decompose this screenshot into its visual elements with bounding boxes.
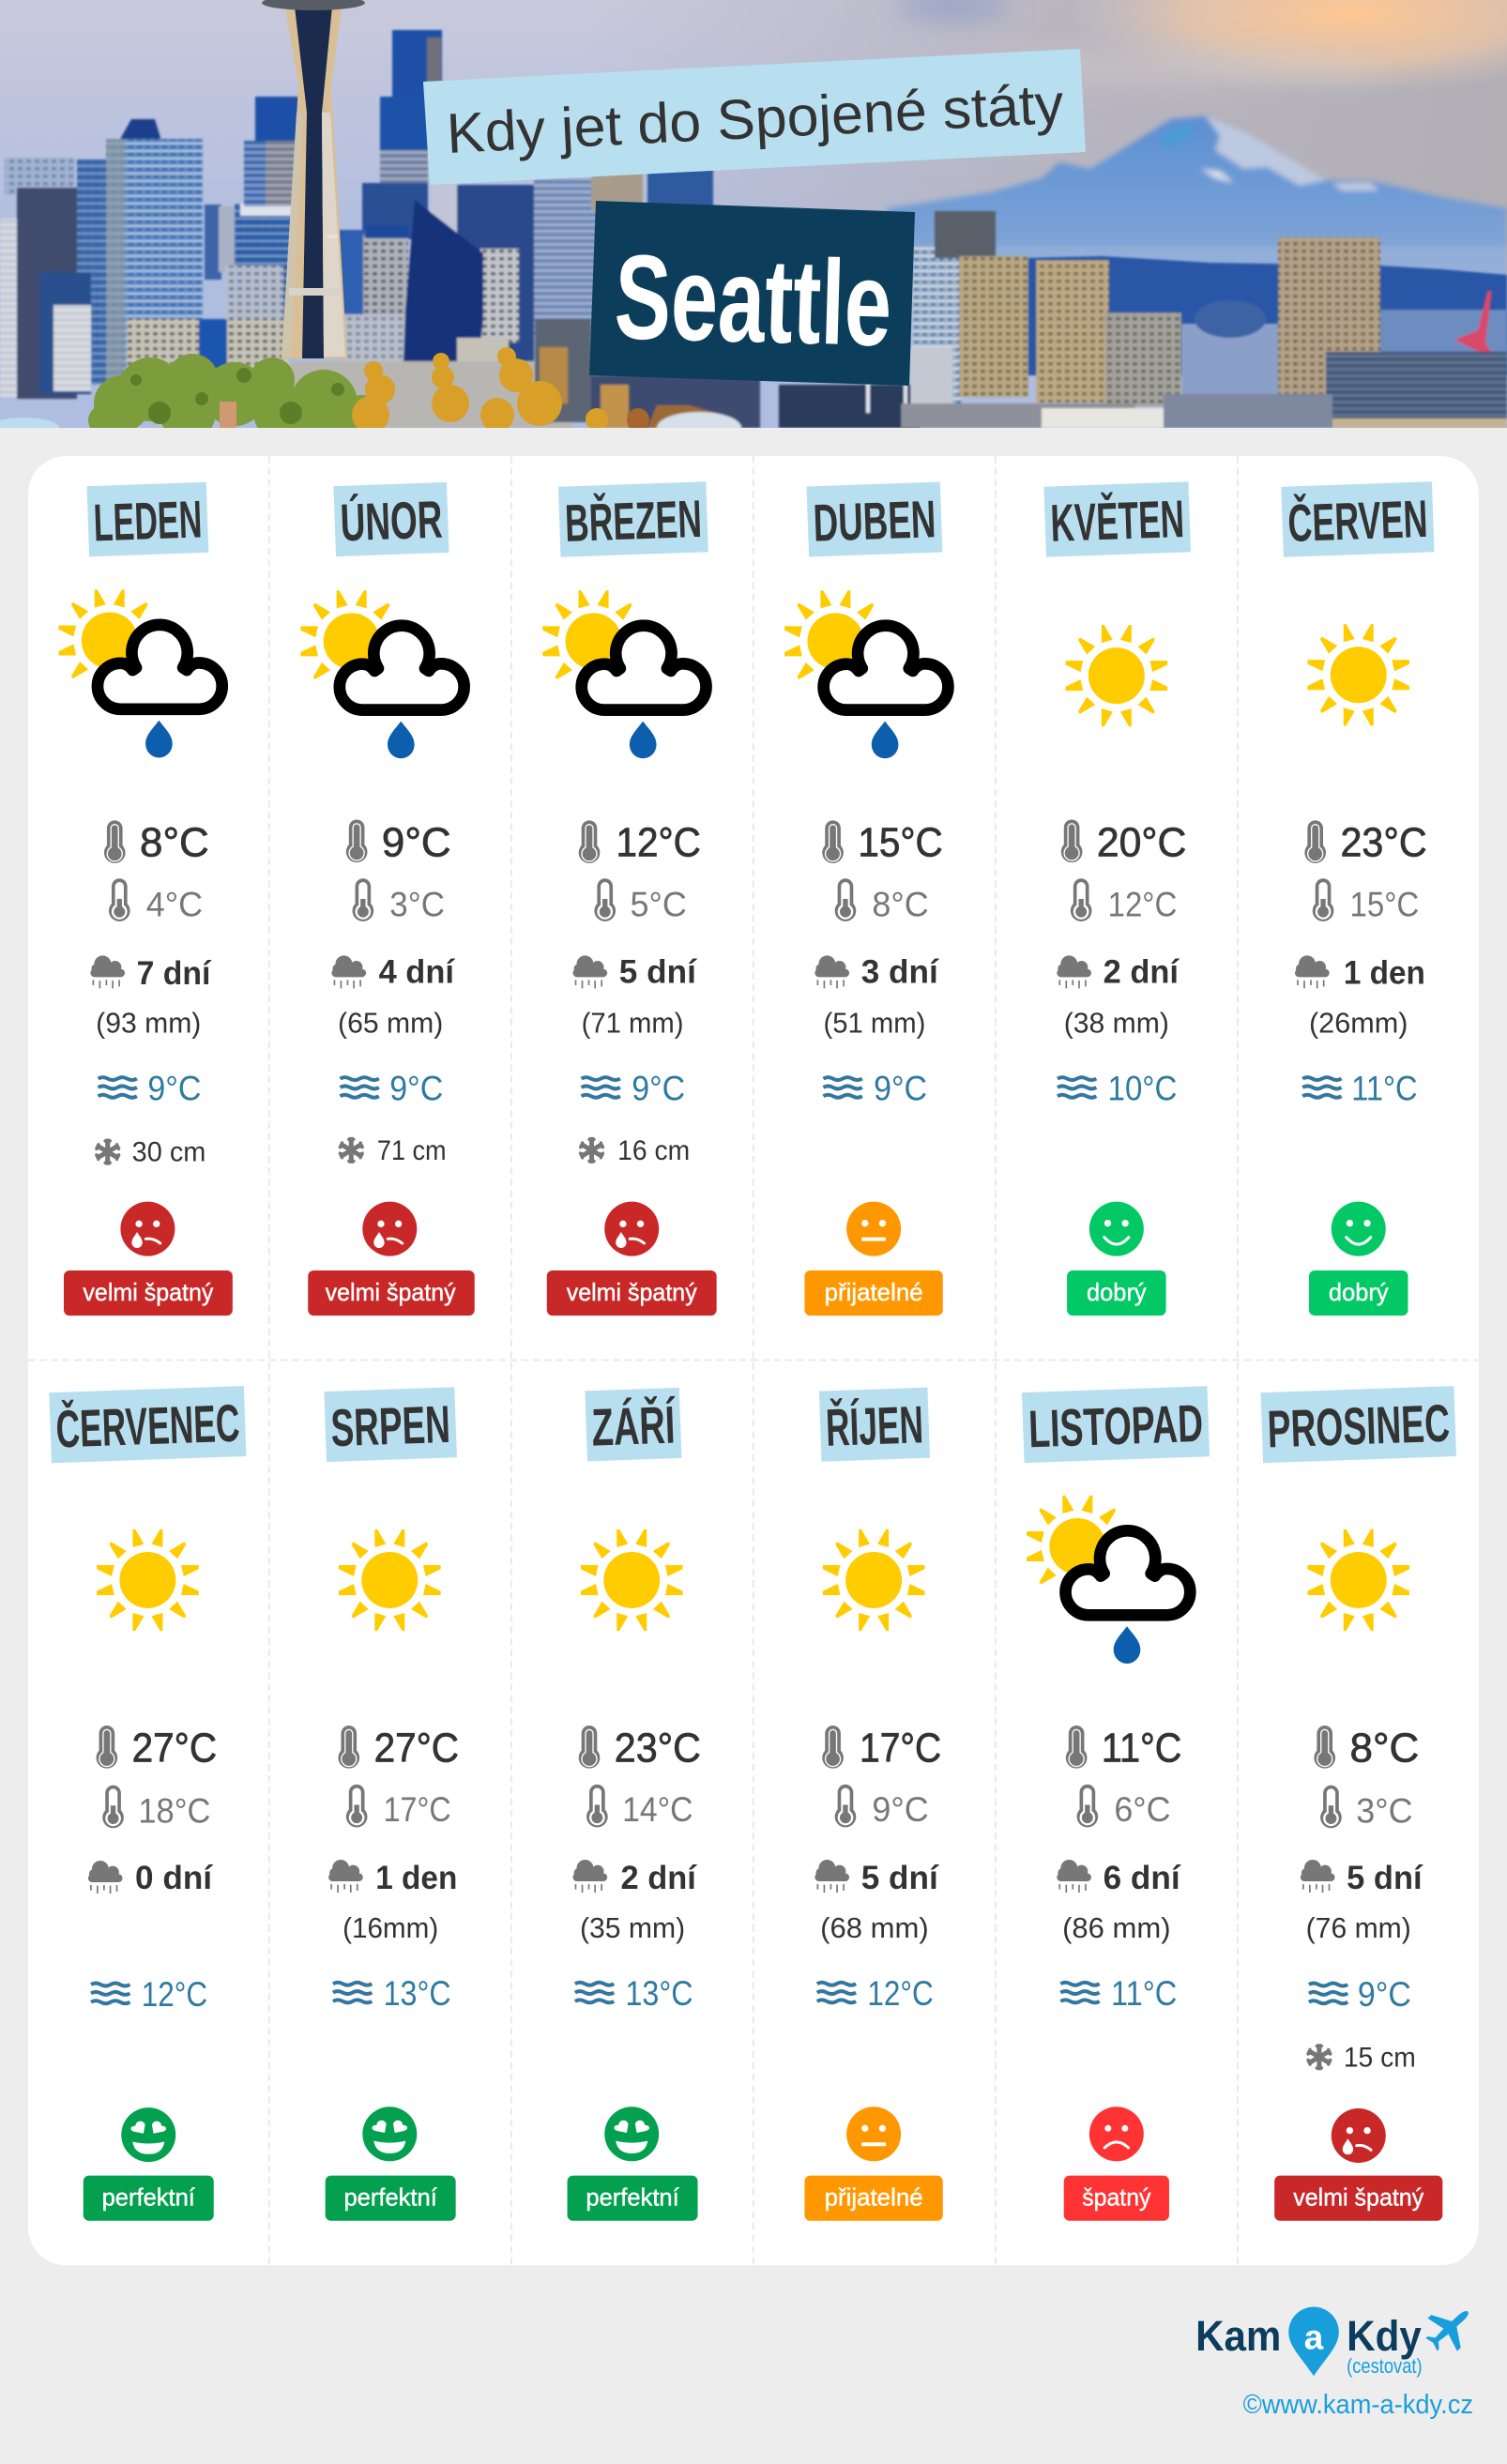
icon: sun: [823, 1529, 924, 1631]
rating pill: [804, 1270, 943, 1316]
icon: sun: [581, 1529, 683, 1631]
sea temperature: [1058, 1069, 1177, 1107]
snow: [1307, 2042, 1416, 2073]
month label: LISTOPAD: [1022, 1386, 1210, 1463]
high temperature: 9°C: [382, 821, 451, 866]
rating pill: perfektní: [343, 2185, 438, 2212]
rain days: 1 den: [375, 1860, 457, 1896]
sea temperature: 12°C: [142, 1975, 207, 2014]
sea temperature: [91, 1975, 207, 2014]
rainfall: (68 mm): [820, 1913, 929, 1944]
rainfall: (38 mm): [1064, 1008, 1169, 1039]
rain days: 5 dní: [861, 1860, 939, 1896]
rating face: [362, 2107, 417, 2161]
high temperature: [1061, 819, 1186, 866]
snow: 30 cm: [132, 1137, 206, 1168]
sea temperature: 9°C: [874, 1069, 927, 1107]
sea temperature: 12°C: [867, 1974, 934, 2013]
low temperature: [1313, 878, 1419, 923]
sea temperature: 9°C: [1358, 1975, 1411, 2014]
month label: ÚNOR: ÚNOR: [340, 490, 444, 552]
month label: ÚNOR: [333, 482, 449, 556]
rain days: 2 dní: [1104, 954, 1180, 991]
rain days: [88, 1860, 213, 1896]
rain days: [573, 1860, 697, 1896]
rain days: [331, 954, 455, 991]
rainfall: (76 mm): [1306, 1913, 1411, 1944]
rating pill: [64, 1270, 233, 1316]
rain days: 6 dní: [1104, 1860, 1181, 1896]
banner: Kdy jet do Spojené státy: [423, 49, 1086, 185]
rain days: 0 dní: [135, 1860, 213, 1896]
month: prosinec: [1261, 1386, 1456, 2221]
rating face: [846, 1202, 901, 1256]
high temperature: [104, 820, 209, 866]
rating pill: [1064, 2176, 1169, 2221]
rating pill: [326, 2176, 456, 2221]
snow: 16 cm: [617, 1135, 690, 1166]
needle: [262, 0, 365, 358]
rating pill: velmi špatný: [567, 1280, 697, 1306]
high temperature: [1066, 1726, 1181, 1771]
sea temperature: [1060, 1974, 1177, 2013]
low temperature: 3°C: [389, 885, 445, 923]
hero: Seattle skyline photo with title banners: [0, 0, 1507, 428]
month: duben: [784, 482, 948, 1316]
sea temperature: 11°C: [1111, 1974, 1177, 2013]
high temperature: [579, 820, 701, 866]
month label: BŘEZEN: [558, 481, 708, 557]
month: listopad: [1022, 1386, 1210, 2221]
rating pill: velmi špatný: [1293, 2185, 1423, 2212]
rain days: [1295, 954, 1425, 991]
sea temperature: [817, 1974, 934, 2013]
rating pill: [804, 2176, 943, 2221]
icon: sun cloud rain: [1027, 1496, 1190, 1664]
rainfall: (65 mm): [338, 1008, 443, 1039]
sea temperature: 9°C: [632, 1069, 685, 1107]
rainfall: (93 mm): [96, 1008, 201, 1039]
high temperature: 8°C: [140, 821, 209, 866]
rating pill: velmi špatný: [326, 1280, 456, 1306]
month label: DUBEN: [807, 482, 942, 556]
low temperature: [835, 878, 929, 923]
rainfall: (86 mm): [1062, 1913, 1171, 1944]
rating face: [604, 1202, 659, 1256]
low temperature: [1071, 878, 1177, 923]
month label: LEDEN: [87, 482, 208, 556]
high temperature: [1314, 1726, 1419, 1771]
rating pill: [1309, 1270, 1408, 1316]
month label: ČERVEN: [1281, 481, 1435, 557]
high temperature: 11°C: [1102, 1726, 1181, 1771]
banner: Seattle: Seattle: [613, 230, 893, 372]
logo: Kam a Kdy: [1195, 2295, 1483, 2378]
rating pill: perfektní: [102, 2185, 196, 2212]
month: červenec: [49, 1386, 246, 2221]
low temperature: [1320, 1786, 1413, 1831]
month label: ZÁŘÍ: [585, 1388, 681, 1461]
icon: sun cloud rain: [300, 590, 464, 758]
high temperature: 27°C: [132, 1726, 217, 1771]
rating face: [1089, 1202, 1144, 1256]
icon: sun: [1307, 624, 1409, 726]
low temperature: [1077, 1785, 1171, 1829]
rating pill: [1067, 1270, 1166, 1316]
rating pill: [308, 1270, 475, 1316]
rainfall: (51 mm): [824, 1008, 925, 1039]
high temperature: 23°C: [615, 1726, 701, 1771]
low temperature: [102, 1786, 210, 1831]
rating pill: [568, 2176, 698, 2221]
high temperature: [822, 820, 943, 866]
month label: ČERVENEC: [49, 1386, 246, 1463]
high temperature: 27°C: [374, 1726, 459, 1771]
high temperature: 15°C: [858, 821, 943, 866]
rain days: 5 dní: [619, 954, 697, 991]
rain days: 3 dní: [861, 954, 939, 991]
rain days: [1301, 1860, 1423, 1896]
rain days: [573, 954, 697, 991]
rain days: [814, 1860, 939, 1896]
month label: SRPEN: [324, 1387, 457, 1462]
sea temperature: [582, 1069, 685, 1107]
icon: sun: [1066, 625, 1167, 726]
icon: sun cloud rain: [784, 590, 948, 758]
icon: sun: [97, 1529, 199, 1631]
snow: [95, 1137, 206, 1168]
high temperature: [822, 1726, 941, 1771]
month label: ŘÍJEN: [819, 1388, 930, 1462]
rain days: 4 dní: [379, 954, 455, 991]
month: říjen: [804, 1388, 943, 2221]
rating pill: velmi špatný: [83, 1280, 213, 1306]
rain days: [814, 954, 939, 991]
month label: ČERVENEC: ČERVENEC: [54, 1393, 240, 1458]
month label: BŘEZEN: BŘEZEN: [564, 489, 703, 553]
panel background: [28, 456, 1479, 2265]
rating pill: dobrý: [1087, 1280, 1147, 1306]
sea temperature: 13°C: [384, 1974, 451, 2013]
snow: [579, 1135, 690, 1166]
high temperature: 17°C: [860, 1726, 941, 1771]
high temperature: 12°C: [616, 821, 701, 866]
month: červen: [1281, 481, 1435, 1316]
left skyline buildings: [0, 219, 17, 397]
rating pill: [547, 1270, 717, 1316]
icon: sun cloud rain: [58, 589, 222, 757]
low temperature: 8°C: [872, 885, 929, 923]
month: srpen: [324, 1387, 459, 2221]
low temperature: 4°C: [146, 885, 203, 923]
high temperature: [346, 819, 451, 866]
high temperature: [1304, 820, 1427, 866]
sea temperature: 11°C: [1351, 1069, 1418, 1107]
snow: 71 cm: [377, 1135, 447, 1166]
rating pill: [84, 2176, 214, 2221]
rain days: [1057, 954, 1180, 991]
sea temperature: [823, 1069, 927, 1107]
icon: plane: [1417, 2295, 1483, 2361]
rain days: [1057, 1860, 1181, 1896]
high temperature: 20°C: [1097, 821, 1186, 866]
logo: Kam a Kdy: Kdy: [1347, 2312, 1422, 2360]
website credit: ©www.kam-a-kdy.cz: [1243, 2390, 1473, 2420]
sea temperature: [1302, 1069, 1418, 1107]
low temperature: 12°C: [1108, 885, 1177, 923]
low temperature: [835, 1785, 929, 1829]
logo: Kam a Kdy: Kam: [1195, 2312, 1281, 2360]
month: září: [568, 1388, 701, 2221]
month label: LEDEN: LEDEN: [93, 489, 203, 552]
sea temperature: 13°C: [626, 1974, 693, 2013]
rating face: [604, 2107, 659, 2161]
rainfall: (71 mm): [582, 1008, 683, 1039]
sea temperature: [1309, 1975, 1411, 2014]
trees: [88, 347, 649, 441]
high temperature: 23°C: [1340, 821, 1427, 866]
snow: [339, 1135, 447, 1166]
rain days: 2 dní: [620, 1860, 697, 1896]
month: květen: [1043, 481, 1191, 1316]
rating face: [1089, 2107, 1144, 2161]
banner: Seattle: [589, 201, 915, 386]
rating face: [1332, 1202, 1386, 1256]
month label: ČERVEN: ČERVEN: [1286, 489, 1429, 553]
rating face: [846, 2107, 901, 2161]
low temperature: 5°C: [631, 885, 687, 923]
rain days: 7 dní: [137, 955, 212, 992]
rating face: [1332, 2108, 1386, 2163]
icon: location pin: a: [1304, 2319, 1324, 2357]
right skyline buildings: [901, 211, 1507, 428]
low temperature: 18°C: [138, 1792, 210, 1831]
month label: KVĚTEN: [1043, 481, 1191, 557]
sea temperature: 10°C: [1108, 1069, 1177, 1107]
month label: SRPEN: SRPEN: [330, 1394, 451, 1457]
low temperature: [586, 1785, 693, 1829]
icon: sun cloud rain: [542, 590, 707, 758]
month label: ZÁŘÍ: ZÁŘÍ: [590, 1395, 677, 1457]
low temperature: [353, 878, 445, 923]
sea temperature: [99, 1069, 201, 1107]
month label: ŘÍJEN: ŘÍJEN: [825, 1394, 924, 1457]
rain days: [328, 1860, 457, 1896]
icon: sun: [339, 1529, 441, 1631]
high temperature: [338, 1726, 459, 1771]
high temperature: [97, 1726, 217, 1771]
rating face: [362, 1202, 417, 1256]
low temperature: 14°C: [622, 1790, 693, 1829]
month label: LISTOPAD: LISTOPAD: [1028, 1393, 1204, 1458]
low temperature: 17°C: [384, 1790, 451, 1829]
month: březen: [542, 481, 717, 1316]
snow: 15 cm: [1344, 2042, 1416, 2073]
rating pill: [1274, 2176, 1442, 2221]
sea temperature: 9°C: [147, 1069, 201, 1107]
low temperature: [109, 878, 203, 923]
month: únor: [300, 482, 475, 1316]
low temperature: 3°C: [1356, 1792, 1413, 1831]
sea temperature: [333, 1974, 451, 2013]
low temperature: 15°C: [1350, 885, 1419, 923]
logo: Kam a Kdy: (cestovat): [1347, 2354, 1423, 2378]
month: leden: [58, 482, 233, 1316]
rain days: 1 den: [1344, 954, 1425, 991]
rating pill: špatný: [1082, 2185, 1150, 2212]
rating pill: perfektní: [586, 2185, 679, 2212]
rating pill: přijatelné: [825, 2185, 923, 2212]
rainfall: (35 mm): [580, 1913, 685, 1944]
low temperature: [594, 878, 687, 923]
low temperature: 6°C: [1114, 1790, 1171, 1829]
icon: sun: [1307, 1529, 1409, 1631]
high temperature: [579, 1726, 701, 1771]
low temperature: 9°C: [872, 1790, 929, 1829]
month label: DUBEN: DUBEN: [813, 489, 936, 553]
rain days: 5 dní: [1347, 1860, 1423, 1896]
rating face: [121, 2107, 175, 2162]
rainfall: (16mm): [342, 1913, 438, 1944]
rain days: [90, 955, 212, 992]
banner: Kdy jet do Spojené státy: Kdy jet do Spojené státy: [445, 72, 1065, 165]
sea temperature: [575, 1974, 693, 2013]
high temperature: 8°C: [1350, 1726, 1419, 1771]
month label: KVĚTEN: KVĚTEN: [1050, 489, 1185, 553]
icon: location pin: [1288, 2307, 1339, 2376]
rating pill: přijatelné: [825, 1280, 923, 1306]
sea temperature: 9°C: [389, 1069, 443, 1107]
sea temperature: [341, 1069, 443, 1107]
rainfall: (26mm): [1309, 1008, 1408, 1039]
rating face: [120, 1202, 175, 1256]
rating pill: dobrý: [1329, 1280, 1389, 1306]
low temperature: [346, 1785, 451, 1829]
